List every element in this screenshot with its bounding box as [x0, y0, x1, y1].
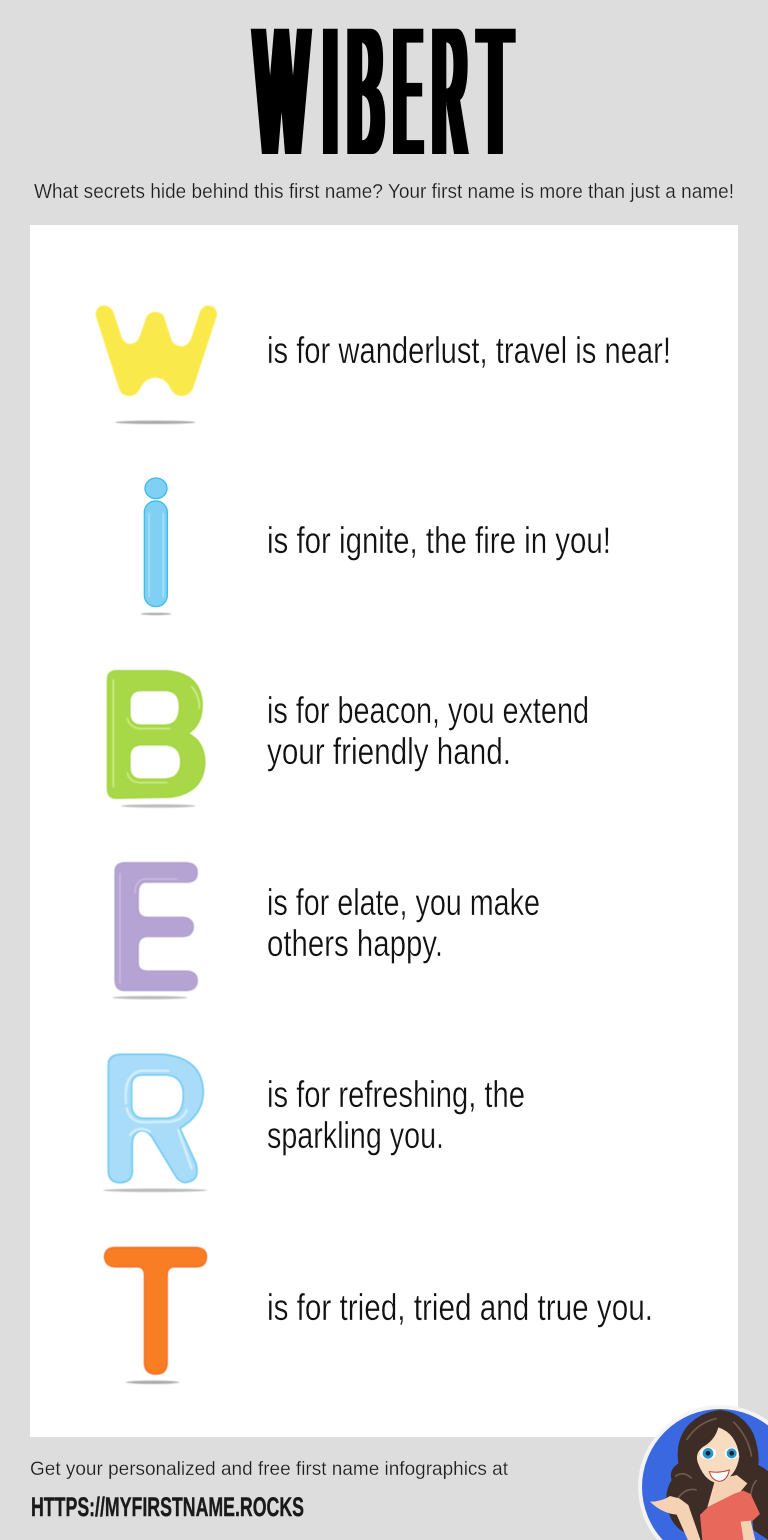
icon: letter W — [96, 306, 217, 424]
text: R lines: is for refreshing, the — [267, 1074, 525, 1115]
text: E lines: is for elate, you make — [267, 882, 540, 923]
text: B lines: your friendly hand. — [267, 731, 511, 772]
text: R lines: sparkling you. — [267, 1115, 444, 1156]
hand and arm — [650, 1496, 702, 1540]
icon: letter B — [107, 671, 205, 808]
footer text: Get your personalized and free first name infographics at — [30, 1458, 509, 1480]
footer url: HTTPS://MYFIRSTNAME.ROCKS — [31, 1492, 304, 1522]
eyes — [700, 1447, 739, 1459]
text: B lines: is for beacon, you extend — [267, 690, 589, 731]
text: E lines — [267, 882, 540, 964]
icon: letter i — [141, 478, 171, 615]
text: T line: is for tried, tried and true you. — [267, 1287, 653, 1328]
hair highlights — [675, 1418, 757, 1507]
shirt — [700, 1491, 760, 1540]
hair — [666, 1410, 768, 1540]
text: E lines: others happy. — [267, 923, 443, 964]
icon: letter E — [113, 863, 197, 999]
right arm — [741, 1521, 756, 1540]
icon: letter T — [104, 1247, 207, 1384]
icon: avatar — [638, 1405, 768, 1540]
subtitle: What secrets hide behind this first name? Your first name is more than just a name! — [34, 181, 734, 203]
neck and chest — [707, 1475, 747, 1507]
panel: letters card — [30, 225, 738, 1437]
title — [256, 0, 512, 193]
text: B lines — [267, 690, 589, 772]
mouth — [709, 1470, 729, 1481]
text: I line: is for ignite, the fire in you! — [267, 520, 611, 561]
text: W line: is for wanderlust, travel is near! — [267, 330, 671, 371]
icon: letter R — [103, 1054, 207, 1192]
face — [697, 1427, 739, 1483]
text: R lines — [267, 1074, 525, 1156]
